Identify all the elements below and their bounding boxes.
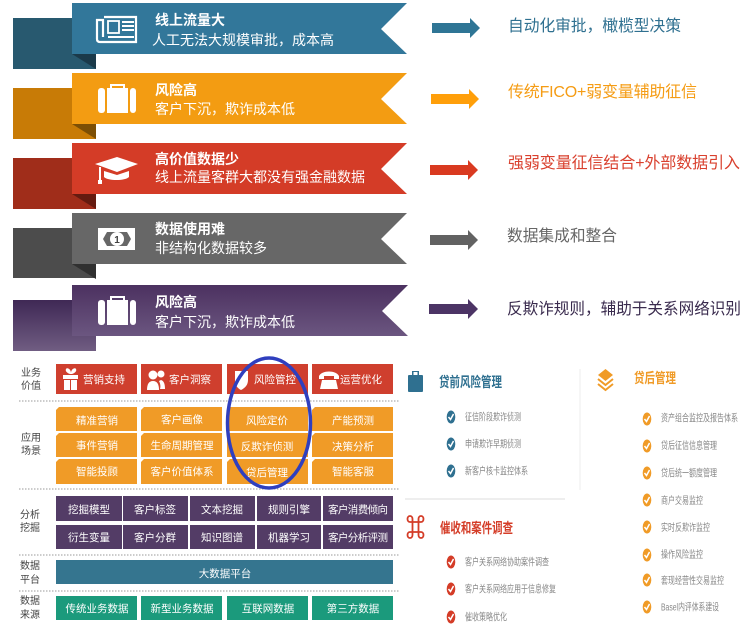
checklist: 催收策略优化	[465, 610, 507, 624]
solution text 1: 自动化审批，橄榄型决策	[508, 17, 681, 35]
row label: business value: 业务	[21, 366, 41, 379]
ribbon 4: data hard to use: 非结构化数据较多	[155, 240, 267, 256]
icon: shield	[235, 371, 248, 390]
ribbon 5: high risk (purple): 风险高	[155, 294, 197, 310]
solution text 4: 数据集成和整合	[507, 227, 617, 245]
checklist: 实时反欺诈监控	[661, 521, 710, 534]
ribbon 1: high online traffic: 人工无法大规模审批，成本高	[152, 32, 334, 48]
highlight ellipse	[228, 358, 310, 488]
checklist: 新客户核卡监控体系	[465, 464, 528, 478]
icon: layers	[598, 369, 613, 390]
checklist	[643, 412, 738, 614]
row label: data sources: 数据	[20, 594, 40, 607]
application scenario buttons: 生命周期管理	[150, 439, 214, 452]
business value buttons	[56, 364, 393, 394]
row label: data platform: 数据	[20, 559, 40, 572]
arrow: gray	[430, 230, 478, 250]
application scenario buttons: 反欺诈侦测	[241, 440, 293, 453]
analysis buttons: 客户标签	[134, 503, 176, 516]
application scenario buttons: 贷后管理	[246, 466, 288, 479]
row label: data platform	[20, 559, 40, 586]
ribbon 1: high online traffic: 线上流量大	[155, 12, 225, 28]
checklist: 客户关系网络协助案件调查	[465, 556, 549, 568]
icon: banknote	[98, 228, 135, 250]
row label: application scenarios	[21, 431, 41, 457]
panel: pre-loan risk management: 贷前风险管理	[439, 374, 502, 390]
application scenario buttons: 客户画像	[161, 413, 203, 426]
analysis buttons	[56, 496, 393, 549]
icon: gift	[63, 368, 78, 390]
business value buttons: 运营优化	[340, 373, 382, 386]
icon: briefcase	[98, 296, 136, 325]
checklist	[447, 410, 528, 478]
analysis buttons: 客户分群	[134, 531, 176, 544]
business value buttons: 风险管控	[254, 373, 296, 386]
analysis buttons: 规则引擎	[268, 503, 310, 516]
ribbon 2: high risk	[13, 73, 407, 139]
icon: newspaper	[97, 17, 136, 42]
row label: business value: 价值	[21, 379, 41, 392]
arrow: blue	[432, 18, 480, 38]
row label: application scenarios: 应用	[21, 431, 41, 444]
checklist: 操作风险监控	[661, 548, 703, 561]
ribbon 4: data hard to use	[13, 213, 407, 279]
icon: command knot	[408, 516, 424, 538]
big data platform bar	[56, 560, 393, 584]
row label: data sources	[20, 594, 40, 621]
application scenario buttons: 精准营销	[76, 414, 118, 427]
application scenario buttons	[56, 407, 393, 484]
data source buttons	[56, 596, 393, 620]
panel: architecture layers	[19, 358, 400, 621]
ribbon 3: little high-value data: 高价值数据少	[155, 151, 239, 167]
data source buttons: 互联网数据	[242, 602, 295, 615]
row label: analysis and mining	[20, 508, 40, 534]
ribbon 3: little high-value data: 线上流量客群大都没有强金融数据	[155, 169, 365, 185]
ribbon 2: high risk: 客户下沉，欺诈成本低	[155, 101, 295, 117]
big data platform bar: 大数据平台	[199, 567, 251, 580]
analysis buttons: 客户消费倾向	[328, 503, 388, 516]
panel: collections and case investigation	[408, 516, 556, 624]
ribbon 5: high risk (purple)	[13, 285, 408, 351]
application scenario buttons: 客户价值体系	[150, 465, 214, 478]
application scenario buttons: 智能投顾	[76, 465, 118, 478]
ribbon 5: high risk (purple): 客户下沉，欺诈成本低	[155, 314, 295, 330]
analysis buttons: 文本挖掘	[201, 503, 243, 516]
ribbon 2: high risk: 风险高	[155, 82, 197, 98]
business value buttons: 营销支持	[83, 373, 125, 386]
panel: post-loan management	[598, 369, 738, 614]
solution text 5: 反欺诈规则，辅助于关系网络识别	[507, 299, 740, 318]
application scenario buttons: 风险定价	[246, 414, 288, 427]
arrow: orange	[431, 89, 479, 109]
checklist: 征信阶段欺诈侦测	[465, 410, 521, 424]
checklist	[447, 556, 556, 624]
checklist: 贷后征信信息管理	[661, 439, 717, 452]
checklist: 商户交易监控	[661, 494, 703, 507]
data source buttons: 传统业务数据	[66, 602, 129, 615]
icon: telephone	[319, 372, 339, 389]
analysis buttons: 挖掘模型	[68, 503, 110, 516]
solution text 2: 传统FICO+弱变量辅助征信	[508, 83, 697, 101]
checklist: 申请欺诈早期侦测	[465, 438, 521, 450]
icon: banknote: 1	[114, 235, 120, 246]
icon: graduation cap	[95, 157, 138, 184]
application scenario buttons: 决策分析	[332, 440, 374, 453]
row label: business value	[21, 366, 41, 392]
row label: analysis and mining: 分析	[20, 508, 40, 521]
panel: collections and case investigation: 催收和案件调查	[440, 520, 513, 536]
row label: data sources: 来源	[20, 608, 40, 621]
data source buttons: 新型业务数据	[150, 602, 214, 615]
solution text 3: 强弱变量征信结合+外部数据引入	[508, 154, 740, 172]
ribbon 1: high online traffic	[13, 3, 407, 69]
row label: analysis and mining: 挖掘	[20, 521, 40, 534]
row label: application scenarios: 场景	[21, 444, 41, 457]
ribbon 4: data hard to use: 数据使用难	[155, 221, 225, 237]
analysis buttons: 知识图谱	[201, 531, 243, 544]
checklist: 贷后统一额度管理	[661, 466, 717, 480]
icon: people	[147, 370, 165, 390]
data source buttons: 第三方数据	[327, 602, 380, 615]
arrow: purple	[429, 299, 478, 319]
checklist: 客户关系网络应用于信息修复	[465, 582, 556, 596]
business value buttons: 客户洞察	[169, 373, 211, 386]
arrow: red	[430, 160, 478, 180]
application scenario buttons: 智能客服	[332, 465, 374, 478]
application scenario buttons: 事件营销	[76, 439, 118, 452]
panel: pre-loan risk management	[408, 371, 528, 478]
analysis buttons: 衍生变量	[68, 531, 110, 544]
row label: data platform: 平台	[20, 573, 40, 586]
analysis buttons: 客户分析评测	[328, 531, 388, 544]
analysis buttons: 机器学习	[268, 531, 310, 544]
panel: post-loan management: 贷后管理	[634, 370, 676, 386]
icon: briefcase	[98, 84, 136, 113]
icon: bag	[408, 371, 423, 392]
application scenario buttons: 产能预测	[332, 414, 374, 427]
ribbon 3: little high-value data	[13, 143, 407, 209]
